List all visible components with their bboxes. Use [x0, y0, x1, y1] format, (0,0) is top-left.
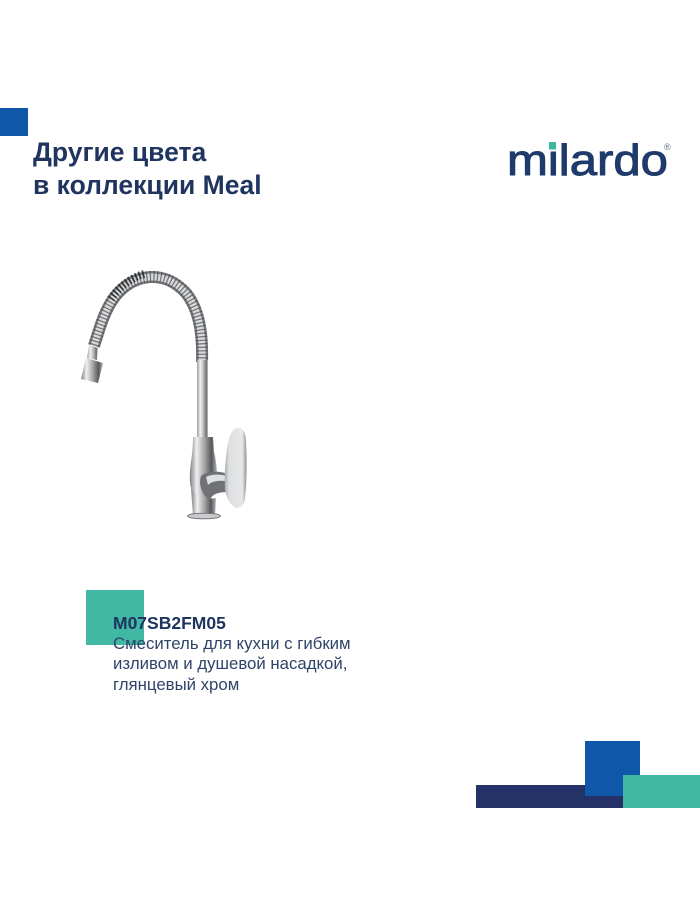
logo registered mark: ®: [664, 142, 671, 152]
logo wordmark: milardo: [507, 136, 668, 185]
title: [33, 137, 262, 200]
decorative teal square: [86, 590, 144, 645]
product description: [113, 613, 351, 694]
spray head: [81, 345, 103, 383]
teal block: [623, 775, 700, 808]
product text: Смеситель для кухни с гибким: [113, 634, 351, 652]
icon: chrome kitchen faucet: [81, 270, 247, 520]
decorative corner blocks: [476, 741, 700, 808]
title: в коллекции Meal: [33, 170, 262, 200]
navy bar: [476, 785, 623, 808]
product code: M07SB2FM05: [113, 613, 226, 633]
straight riser: [197, 360, 208, 438]
flexible spout: [94, 274, 202, 362]
decorative blue square: [0, 108, 28, 136]
title: Другие цвета: [33, 137, 206, 167]
product text: глянцевый хром: [113, 674, 239, 694]
product text: [113, 634, 351, 694]
lever handle: [225, 428, 247, 508]
logo teal dot: [549, 142, 556, 150]
logo: milardo: [507, 136, 671, 185]
product text: изливом и душевой насадкой,: [113, 654, 347, 673]
faucet body: [188, 437, 228, 519]
blue block: [585, 741, 640, 796]
